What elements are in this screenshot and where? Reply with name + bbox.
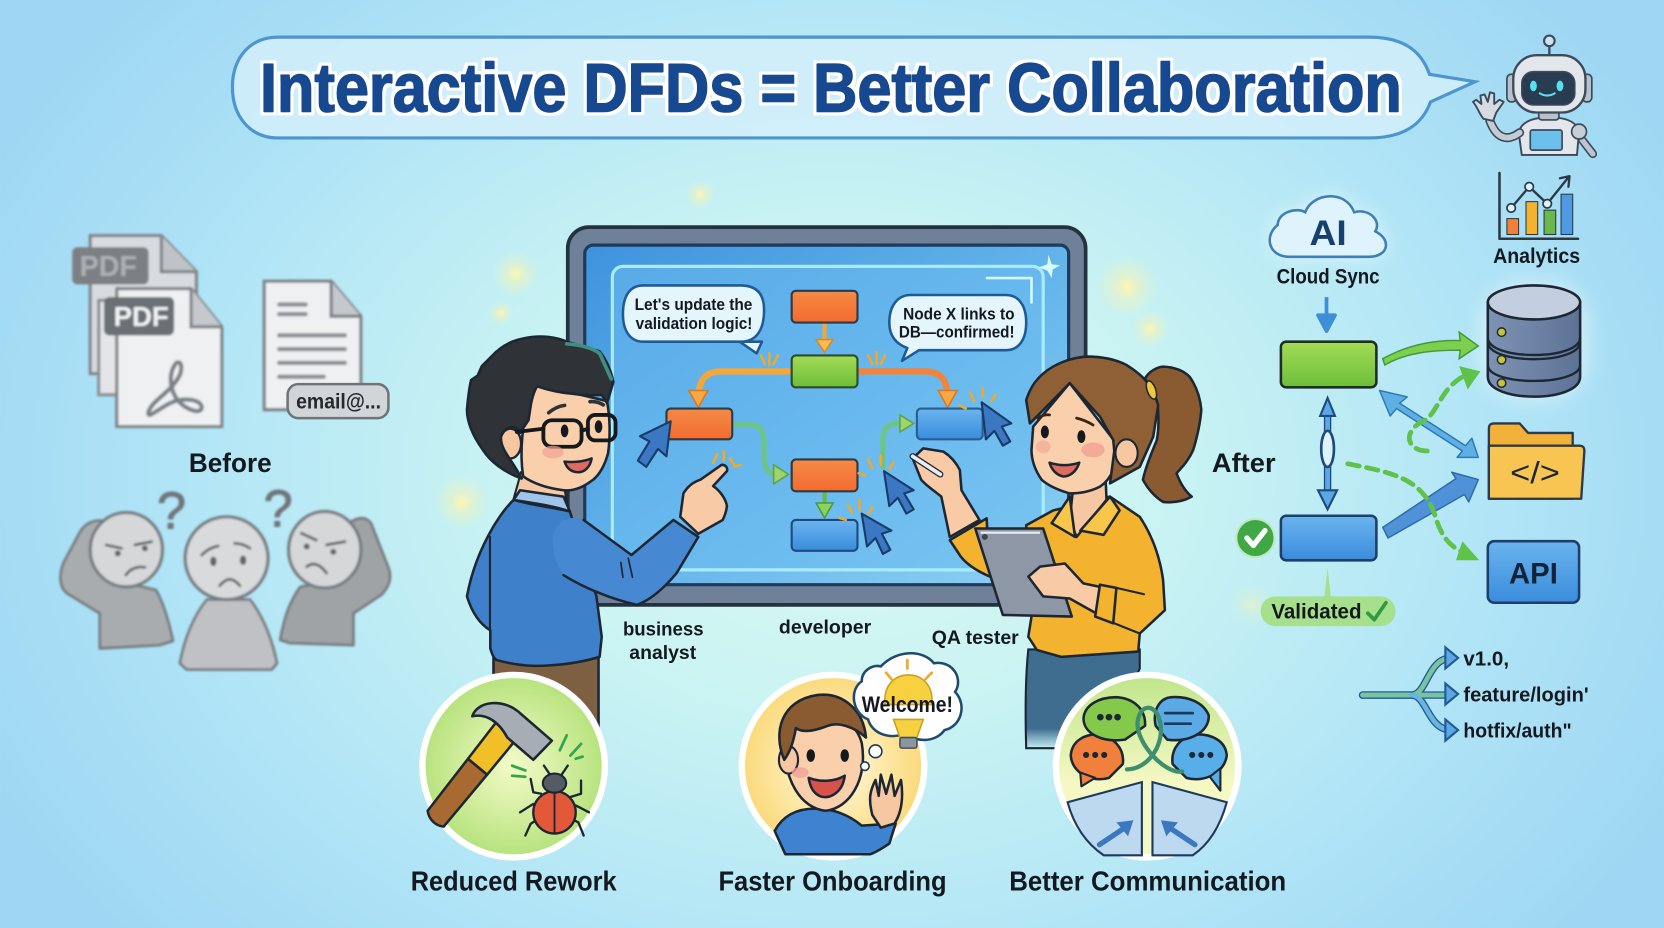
person: qa tester [913, 357, 1201, 748]
analytics label: Analytics [1493, 245, 1580, 268]
neck [1070, 483, 1107, 537]
title text: Interactive DFDs = Better Collaboration [260, 49, 1402, 126]
raised forearm [913, 448, 980, 537]
impact marks [512, 735, 583, 777]
jeans [1026, 649, 1140, 748]
right person [280, 518, 390, 645]
tablet [975, 528, 1072, 617]
cloud sync label: Cloud Sync [1277, 265, 1380, 288]
panel: before [60, 236, 390, 670]
pointing hand [680, 465, 727, 534]
question marks: ? [157, 482, 186, 540]
speech bubble [232, 37, 1475, 138]
blurred document pile: PDF [80, 251, 137, 283]
antenna [1548, 46, 1550, 57]
benefit: better communication: ••• [1082, 744, 1108, 767]
neck [514, 472, 568, 507]
hair [467, 337, 613, 479]
email tag: email@... [296, 391, 381, 414]
confused people [60, 480, 390, 670]
node: blue validated [1281, 516, 1376, 560]
benefit: better communication: ••• [1189, 744, 1214, 767]
branch label: v1.0: v1.0, [1463, 647, 1509, 670]
hair highlight [567, 344, 611, 379]
collar left [1052, 497, 1075, 537]
ear [500, 429, 521, 458]
boy [779, 695, 866, 811]
screens with arrows [1068, 782, 1142, 855]
node: center orange [792, 459, 857, 491]
light bulb [885, 660, 932, 748]
validated pill: Validated [1271, 601, 1362, 624]
icon: code folder: </> [1510, 455, 1560, 490]
branch diagram [1363, 647, 1589, 743]
back pdf page [90, 236, 196, 374]
arrow: green to database [1383, 332, 1478, 365]
glasses [517, 415, 616, 447]
cheeks [1081, 443, 1105, 457]
pen [913, 456, 940, 474]
node: right blue [917, 409, 983, 439]
center person [180, 600, 277, 670]
branch label: feature/login: feature/login' [1463, 683, 1589, 706]
face [522, 384, 610, 490]
chat bubbles [1071, 734, 1123, 779]
hair [1026, 357, 1158, 483]
waving hand [1473, 92, 1504, 121]
benefit: reduced rework [411, 675, 617, 896]
eyes and brows [561, 424, 568, 437]
holding hand [1028, 563, 1100, 613]
arrow: dashed to api [1348, 464, 1479, 560]
middle pdf page [99, 300, 119, 395]
arrow: vertical double [1318, 398, 1337, 509]
front pdf page [117, 289, 222, 427]
email document [264, 281, 361, 410]
bubble details: ••• [1096, 704, 1122, 730]
cursor: bottom [862, 514, 891, 554]
icon: analytics chart [1499, 173, 1578, 239]
trousers [493, 658, 599, 743]
bubble: update validation logic: Let's update the [635, 295, 752, 314]
bubble: node x links: DB—confirmed! [899, 322, 1015, 341]
label: Reduced Rework [411, 865, 617, 896]
shirt cuff [1095, 585, 1116, 623]
role labels [623, 617, 1019, 664]
bug [520, 766, 589, 836]
bubble: node x links [889, 295, 1026, 361]
thought bubble [854, 653, 962, 770]
collar [514, 490, 570, 511]
node: top orange [792, 291, 857, 323]
bubble: update validation logic [623, 285, 764, 353]
node: bottom blue [792, 520, 857, 551]
screen [585, 245, 1069, 585]
face [1032, 383, 1115, 493]
bubble: update validation logic: validation logic! [636, 314, 752, 333]
ear [1115, 439, 1138, 467]
boy hair [779, 695, 866, 760]
left person [60, 521, 173, 648]
sparkles around the screen [434, 179, 1276, 628]
email tag [288, 384, 388, 418]
blurred document pile: PDF [114, 301, 169, 332]
hammer [428, 703, 552, 827]
robot mascot [1473, 36, 1593, 155]
knot [1127, 708, 1182, 772]
before label: Before [189, 448, 272, 478]
waving hand [870, 775, 902, 828]
title banner [232, 37, 1475, 138]
icon: api box [1488, 541, 1579, 603]
raised sleeve [950, 518, 990, 577]
label: Better Communication [1009, 865, 1286, 896]
arms [1490, 121, 1520, 138]
ponytail [1143, 367, 1201, 502]
branch label: hotfix/auth: hotfix/auth" [1463, 720, 1572, 743]
boy face [785, 713, 863, 811]
mouth [1050, 463, 1079, 476]
qa tester label: QA tester [932, 627, 1019, 649]
node: green [792, 355, 857, 387]
cursor: right [982, 402, 1011, 446]
benefit: faster onboarding [718, 653, 962, 896]
diagram arrows [689, 324, 957, 518]
badge [422, 675, 605, 857]
eyes [1041, 426, 1049, 438]
cursor: left [638, 421, 671, 467]
icon: database [1480, 281, 1589, 400]
role labels: analyst [629, 642, 697, 664]
shirt [1026, 497, 1165, 657]
icon: ai cloud: AI [1310, 214, 1347, 253]
validated pill [1261, 568, 1395, 626]
head [1507, 74, 1516, 102]
arrow: dashed to database [1409, 366, 1480, 451]
confused people: ? [264, 480, 293, 538]
bubble: node x links: Node X links to [903, 304, 1015, 323]
torso [467, 500, 602, 666]
boy shirt [775, 809, 896, 854]
node: left orange [666, 409, 732, 439]
icon: green check [1236, 519, 1275, 557]
person: business analyst [467, 337, 727, 743]
blurred document pile [72, 236, 361, 427]
welcome text: Welcome! [862, 692, 953, 717]
icon: api box: API [1509, 558, 1558, 591]
monitor frame [568, 227, 1086, 605]
arrow: double green to code folder [1380, 391, 1478, 457]
boy eyes and smile [807, 749, 815, 762]
icon: code folder [1489, 423, 1584, 499]
after label: After [1212, 448, 1276, 478]
torso fold [489, 537, 491, 630]
mouth [565, 458, 592, 472]
benefit: better communication [1009, 675, 1286, 896]
arrow: blue to code folder [1383, 472, 1478, 538]
hair tie [1144, 380, 1159, 400]
cheek [542, 446, 564, 458]
collar right [1080, 497, 1120, 535]
badge [1056, 675, 1238, 857]
icon: ai cloud [1270, 196, 1386, 257]
node: green process [1281, 342, 1376, 387]
badge [742, 675, 924, 857]
label: Faster Onboarding [718, 865, 947, 896]
developer label: developer [779, 617, 872, 639]
neck [1539, 110, 1559, 120]
interactive monitor [568, 227, 1086, 605]
business analyst label: business [623, 619, 704, 641]
arm [553, 518, 698, 605]
panel: after [1212, 173, 1589, 743]
cursor: middle [884, 471, 914, 514]
click sparks [713, 352, 995, 520]
body [1519, 118, 1579, 155]
sleeve fold [1113, 588, 1144, 634]
arrow: cloud to node [1318, 297, 1335, 331]
